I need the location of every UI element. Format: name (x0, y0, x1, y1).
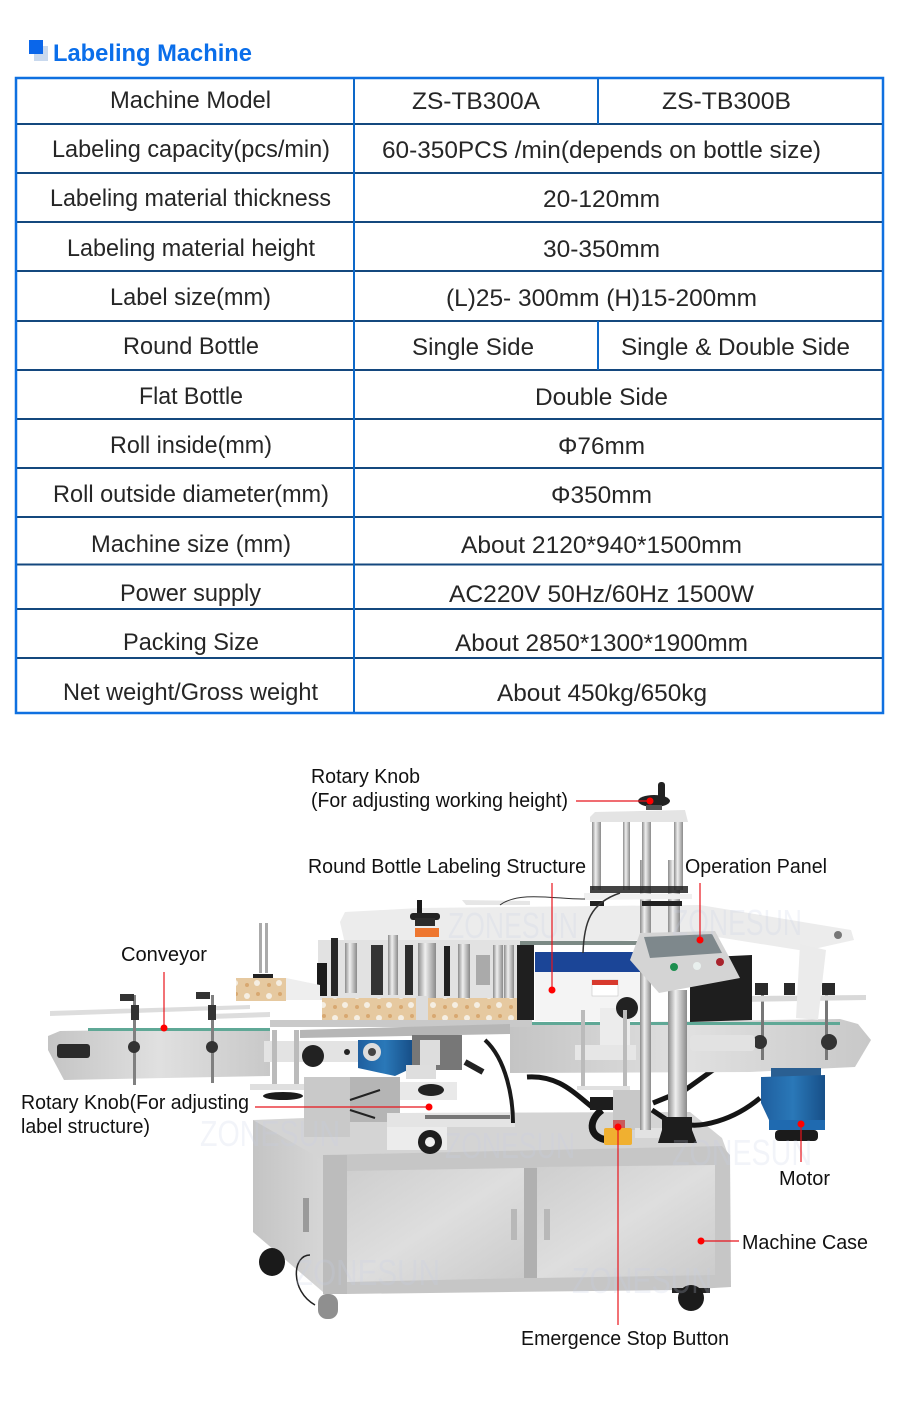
row: round bottle: Single Side (412, 334, 534, 361)
row: label size: Label size(mm) (110, 284, 271, 311)
right conveyor (510, 983, 871, 1073)
turntable and deck (250, 1020, 532, 1100)
callout: emergence stop button: Emergence Stop Button (521, 1328, 729, 1350)
row: labeling material thickness (50, 185, 660, 213)
callout: motor (779, 1120, 830, 1190)
row: labeling capacity (52, 136, 821, 164)
row: roll inside (110, 432, 645, 460)
gray post and stop button base (590, 1090, 665, 1138)
row: power supply: AC220V 50Hz/60Hz 1500W (449, 581, 754, 608)
spare label roll (236, 923, 320, 1001)
row: packing size: Packing Size (123, 629, 259, 656)
ZONESUN watermarks: ZONESUN (200, 1113, 340, 1154)
central spindle and adjusting structure (304, 1035, 515, 1154)
row: labeling capacity: Labeling capacity(pcs/min) (52, 136, 330, 163)
black cables (527, 1070, 760, 1140)
callout: operation panel: Operation Panel (685, 856, 827, 878)
row: power supply: Power supply (120, 580, 261, 607)
right support columns (640, 860, 697, 1143)
row: round bottle (123, 333, 850, 361)
callout: conveyor (121, 944, 207, 1032)
row: packing size (123, 629, 748, 657)
row: labeling material height: Labeling material height (67, 235, 315, 262)
callout: motor: Motor (779, 1168, 830, 1190)
row: labeling capacity: 60-350PCS /min(depends on bottle size) (382, 137, 821, 164)
callout: conveyor: Conveyor (121, 944, 207, 966)
callout: round bottle labeling structure: Round Bottle Labeling Structure (308, 856, 586, 878)
callout: rotary knob label structure: Rotary Knob(For adjusting (21, 1092, 249, 1114)
operation panel box (630, 931, 752, 1022)
row: power supply (120, 580, 754, 608)
callout: rotary knob working height: Rotary Knob (311, 766, 420, 788)
blue gearbox (358, 1040, 412, 1076)
row: labeling material height (67, 235, 660, 263)
ZONESUN watermarks (200, 902, 812, 1301)
ZONESUN watermarks: ZONESUN (672, 902, 802, 943)
row: flat bottle (139, 383, 668, 411)
large label roll (322, 996, 517, 1020)
row: roll outside diameter: Roll outside diameter(mm) (53, 481, 329, 508)
height knob on labeling head (410, 900, 440, 937)
row: round bottle: Round Bottle (123, 333, 259, 360)
row: machine model: ZS-TB300B (662, 88, 791, 115)
machine case (253, 1112, 731, 1294)
row: machine size: About 2120*940*1500mm (461, 532, 742, 559)
row: labeling material thickness: Labeling material thickness (50, 185, 331, 212)
row: labeling material height: 30-350mm (543, 236, 660, 263)
wheels (259, 1248, 710, 1319)
row: packing size: About 2850*1300*1900mm (455, 630, 748, 657)
row: machine model: Machine Model (110, 87, 271, 114)
callout: rotary knob working height: (For adjusting working height) (311, 790, 568, 812)
row: roll outside diameter (53, 481, 652, 509)
row: label size (110, 284, 757, 312)
specification table (16, 78, 883, 713)
row: machine size (91, 531, 742, 559)
row: net and gross weight (63, 679, 707, 707)
row: roll inside: Roll inside(mm) (110, 432, 272, 459)
white labeling arm (340, 900, 854, 1020)
row: flat bottle: Flat Bottle (139, 383, 243, 410)
vertical rollers and rods (317, 935, 534, 1020)
blue panel and white cabinet (500, 893, 640, 1090)
ZONESUN watermarks: ZONESUN (448, 905, 578, 946)
row: round bottle: Single & Double Side (621, 334, 850, 361)
row: net and gross weight: About 450kg/650kg (497, 680, 707, 707)
ZONESUN watermarks: ZONESUN (572, 1260, 712, 1301)
callout: rotary knob label structure: label structure) (21, 1116, 150, 1138)
ZONESUN watermarks: ZONESUN (445, 1125, 575, 1166)
row: net and gross weight: Net weight/Gross weight (63, 679, 318, 706)
row: machine model: ZS-TB300A (412, 88, 540, 115)
row: label size: (L)25- 300mm (H)15-200mm (446, 285, 757, 312)
callout: emergence stop button (521, 1124, 729, 1350)
title: Labeling Machine: Labeling Machine (53, 40, 252, 67)
left conveyor (48, 992, 270, 1085)
motor (761, 1068, 825, 1141)
row: labeling material thickness: 20-120mm (543, 186, 660, 213)
row: roll inside: Φ76mm (558, 433, 645, 460)
callout: machine case: Machine Case (742, 1232, 868, 1254)
callout: round bottle labeling structure (308, 856, 586, 994)
callout: operation panel (685, 856, 827, 944)
row: machine size: Machine size (mm) (91, 531, 291, 558)
callout: rotary knob label structure (21, 1092, 432, 1138)
row: roll outside diameter: Φ350mm (551, 482, 652, 509)
top rotary knob (638, 782, 670, 810)
ZONESUN watermarks: ZONESUN (295, 1252, 440, 1293)
callout: rotary knob working height (311, 766, 654, 812)
ZONESUN watermarks: ZONESUN (672, 1132, 812, 1173)
emergency stop button (604, 1120, 632, 1145)
machine illustration (48, 782, 871, 1319)
row: flat bottle: Double Side (535, 384, 668, 411)
row: machine model (110, 87, 791, 115)
upper column assembly (584, 810, 692, 906)
